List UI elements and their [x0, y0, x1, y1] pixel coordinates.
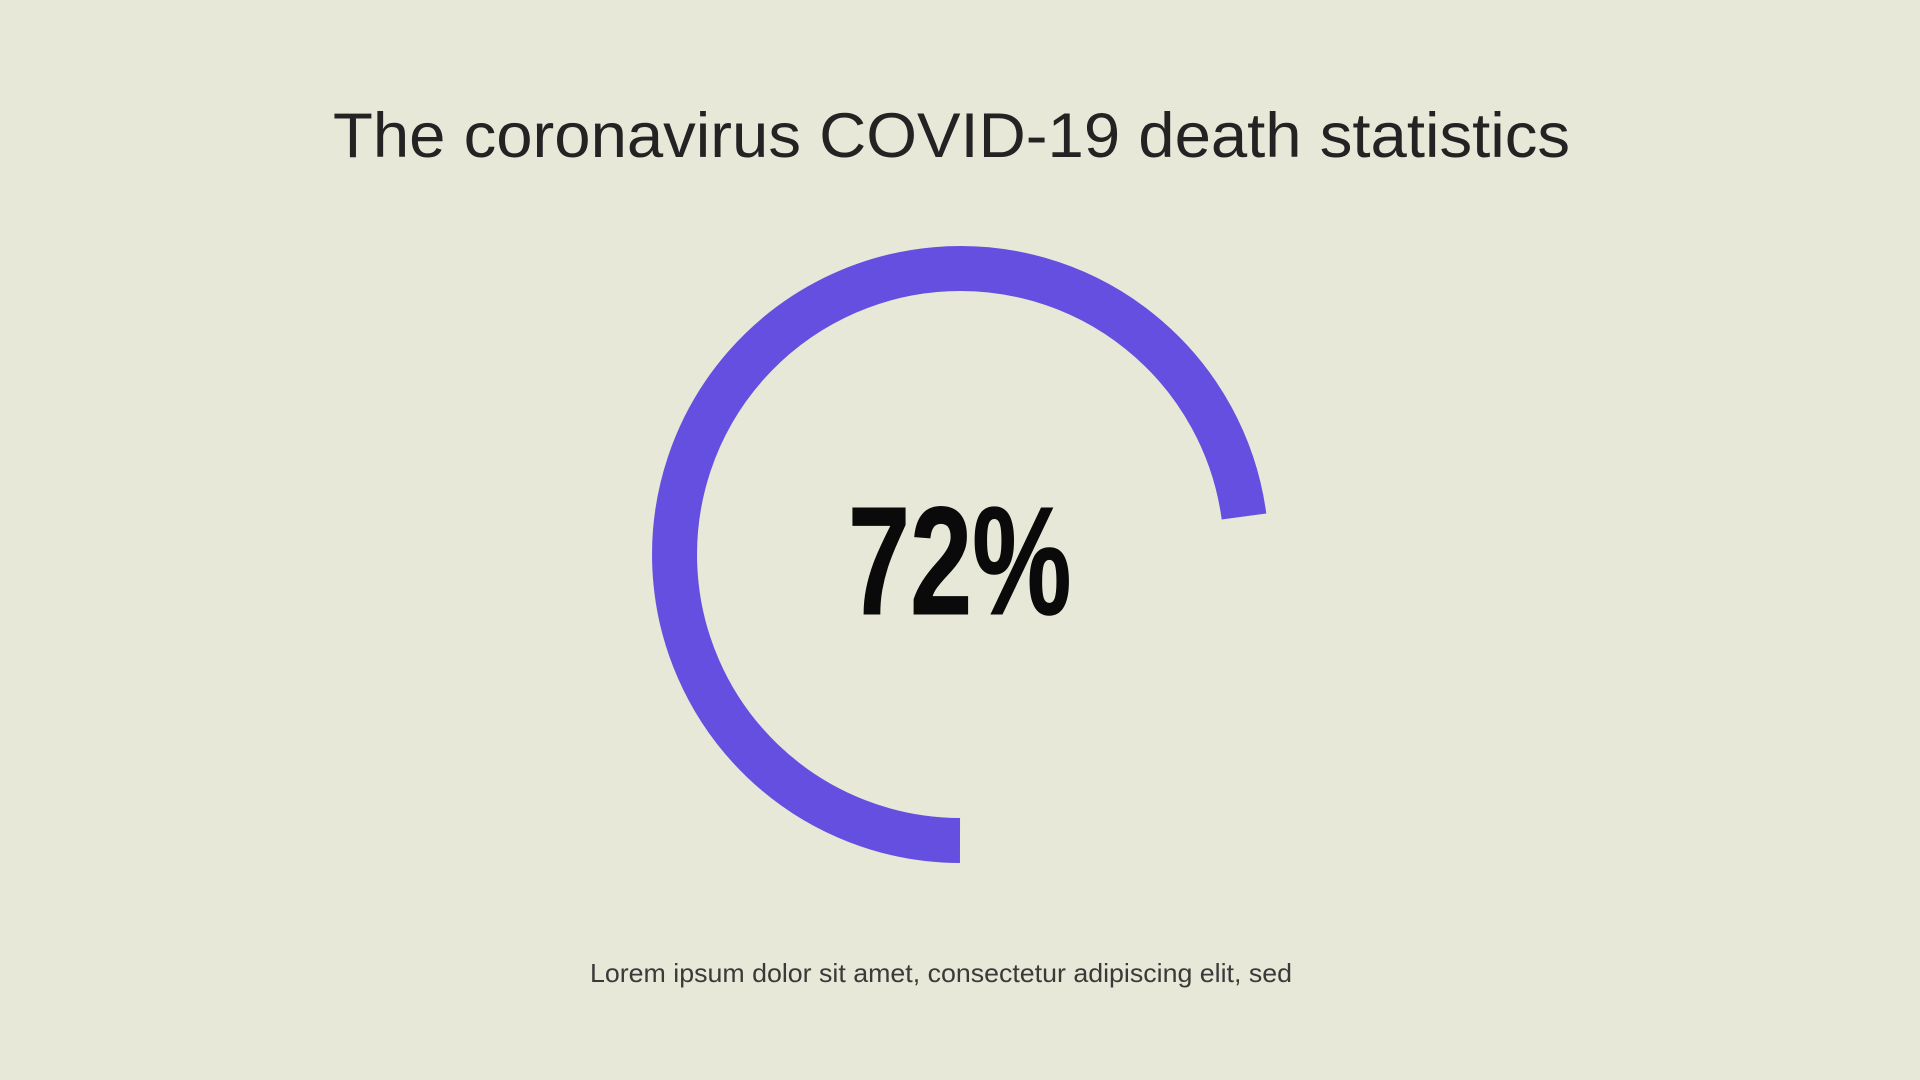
title: The coronavirus COVID-19 death statistics: [333, 101, 1570, 171]
caption: Lorem ipsum dolor sit amet, consectetur adipiscing elit, sed: [590, 958, 1292, 988]
center value: 72%: 72%: [848, 475, 1071, 648]
progress ring: 72% arc: [675, 269, 1244, 840]
